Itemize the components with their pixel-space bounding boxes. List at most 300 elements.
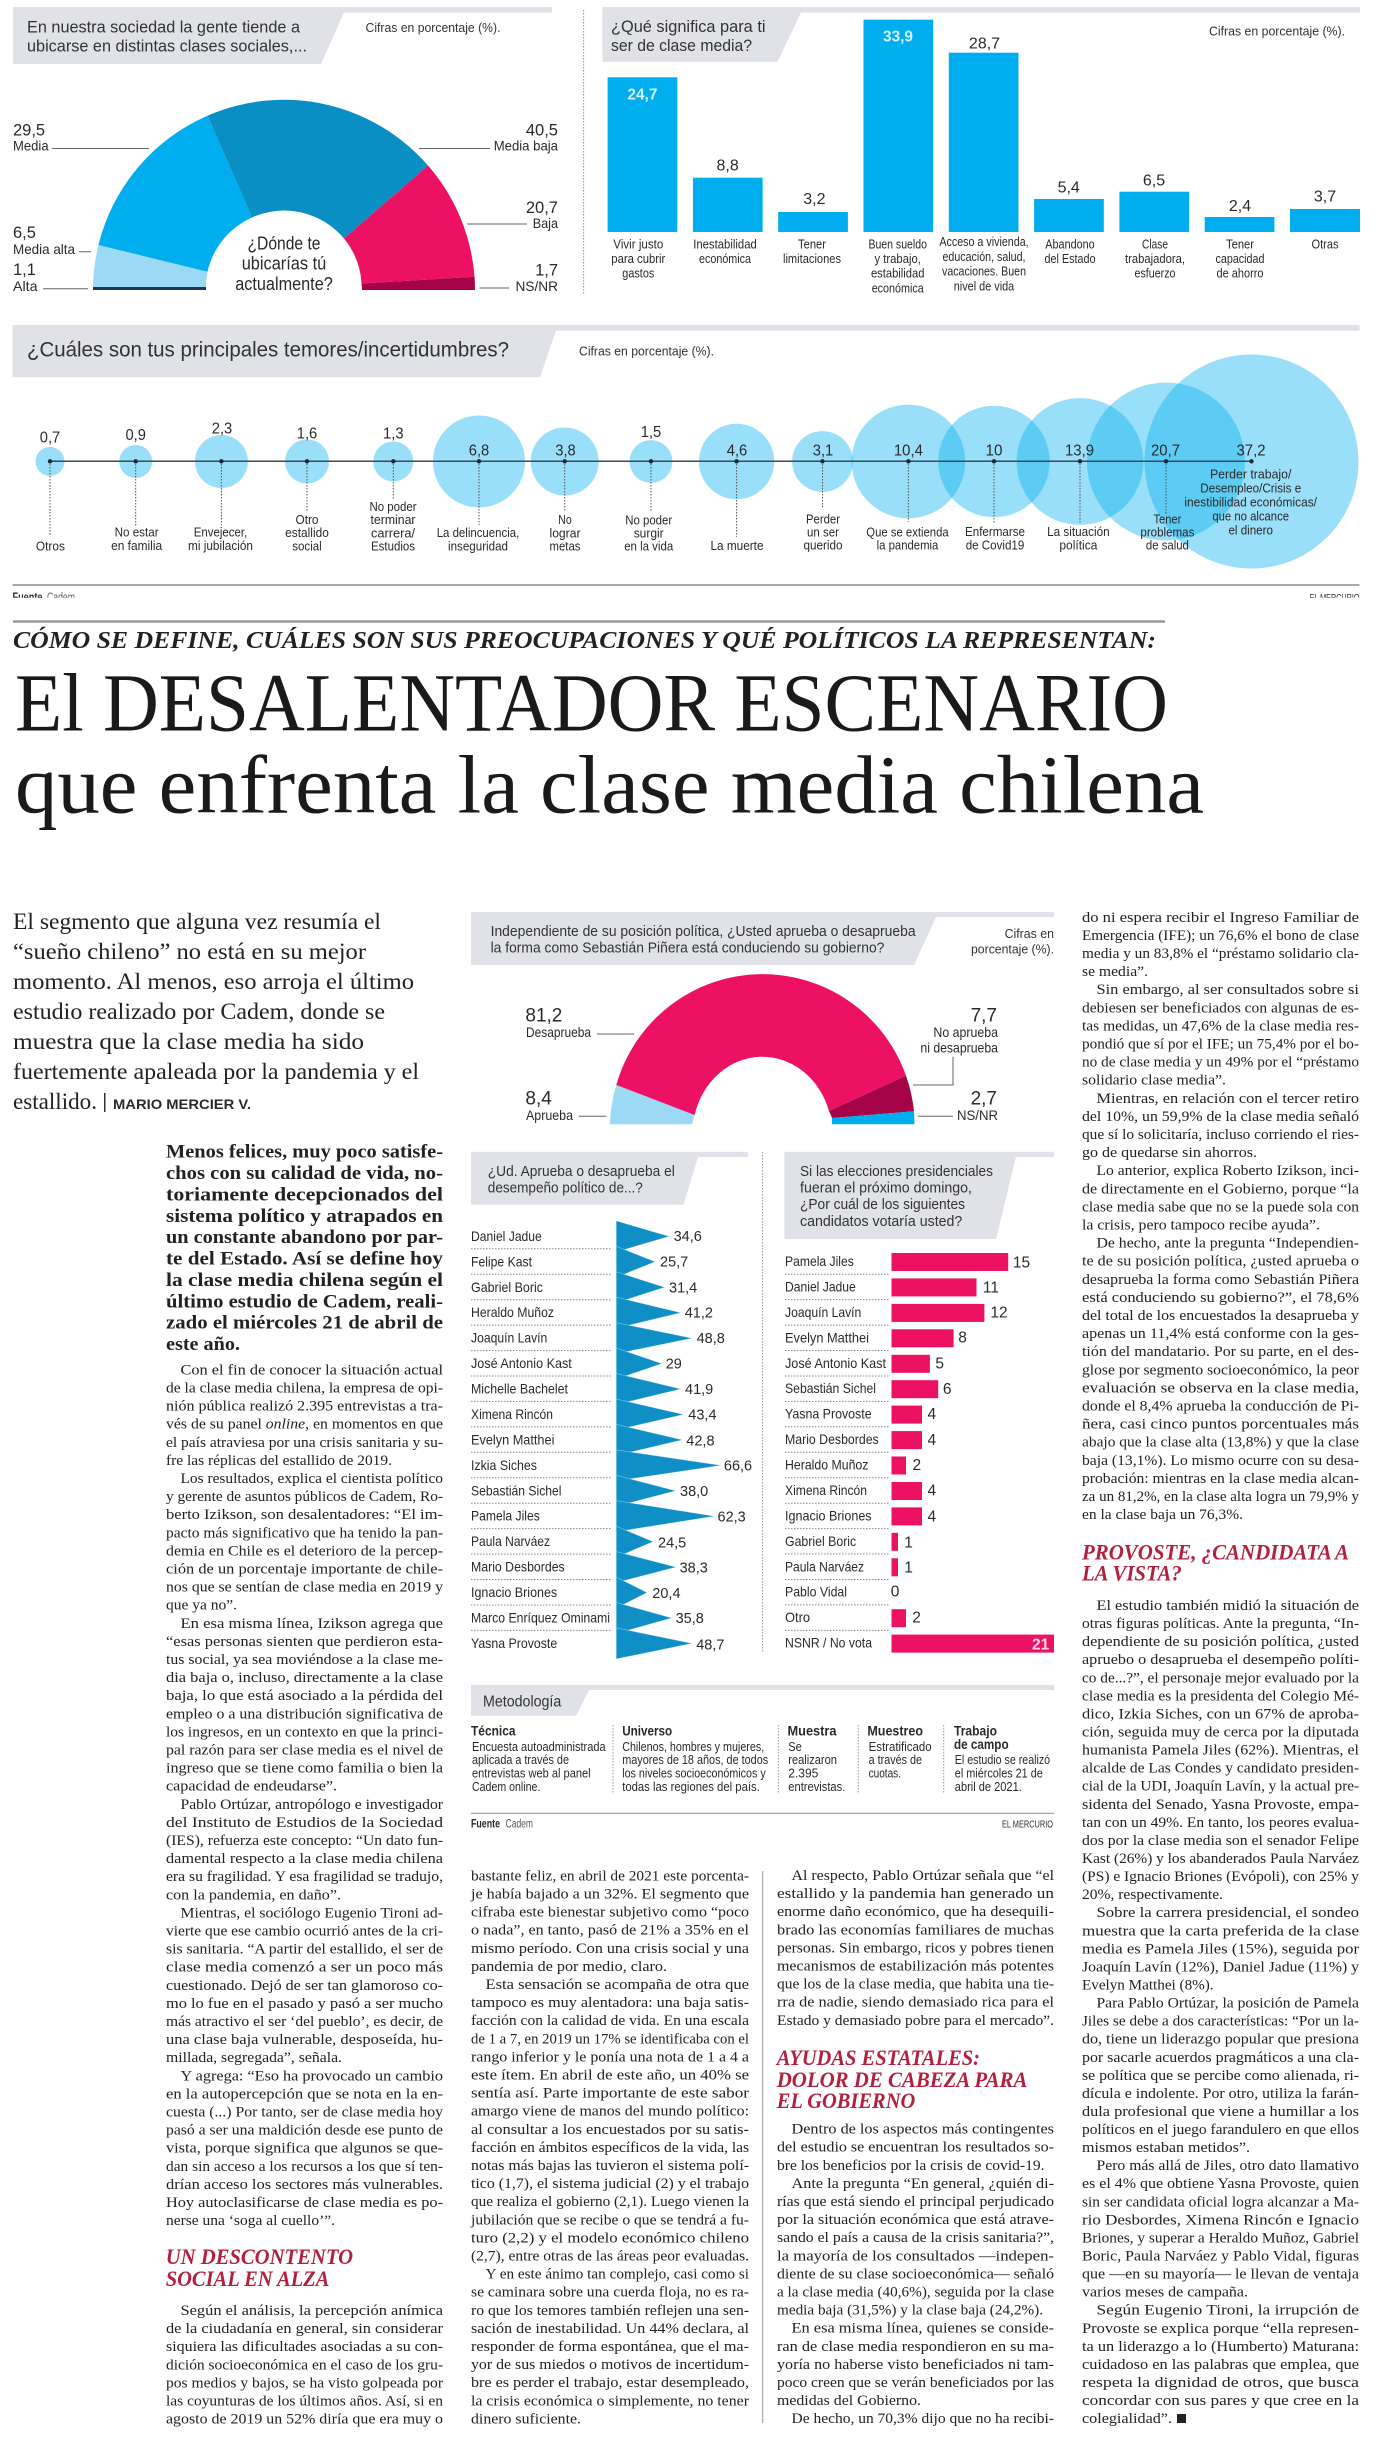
article column 1: capacidad de endeudarse”. [166, 1779, 337, 1795]
kicker: CÓMO SE DEFINE, CUÁLES SON SUS PREOCUPACIONES Y QUÉ POLÍTICOS LA REPRESENTAN: [13, 627, 1156, 654]
bubble labels: La situación [1047, 524, 1110, 539]
approval values: 62,3 [718, 1510, 746, 1526]
heading: social class question: En nuestra sociedad la gente tiende a [27, 18, 301, 36]
heading: meaning question: ser de clase media? [611, 37, 752, 55]
article column 3 continuation: poco creen que se verán beneficiados por las [777, 2375, 1054, 2391]
bubble values: 4,6 [727, 443, 747, 460]
column: técnica: entrevistas web al panel [472, 1766, 591, 1780]
politician names: Joaquín Lavín [471, 1330, 547, 1346]
candidate names: Paula Narváez [785, 1558, 864, 1574]
bar category labels: limitaciones [783, 251, 841, 266]
bar category labels: del Estado [1044, 251, 1096, 266]
approval values: 48,8 [697, 1331, 725, 1347]
axis dots [48, 459, 1254, 463]
labels: left values: Alta [13, 278, 38, 294]
article column 2: responder de forma espontánea, que el ma- [471, 2339, 749, 2355]
subheading: provoste: LA VISTA? [1081, 1561, 1182, 1586]
politician names: Paula Narváez [471, 1533, 550, 1549]
intro paragraph [13, 909, 419, 1114]
bubble values: 2,3 [212, 421, 232, 438]
article column 4 continuation: sin ser candidata oficial logra alcanzar a Ma- [1082, 2194, 1359, 2210]
article column 4 continuation: Para Pablo Ortúzar, la posición de Pamela [1096, 1996, 1359, 2012]
article column 4 continuation: Boric, Paula Narváez y Pablo Vidal, figuras [1082, 2248, 1359, 2264]
article column 1: en la autopercepción que se nota en la en- [166, 2086, 443, 2102]
heading: politician approval question: ¿Ud. Aprueba o desaprueba el [488, 1164, 675, 1180]
politician names: Izkia Siches [471, 1457, 537, 1473]
article column 2: de 1 a 7, en 2019 un 17% se identificaba con el [471, 2031, 749, 2047]
bubble labels: metas [550, 538, 581, 553]
article column 3: Al respecto, Pablo Ortúzar señala que “el [792, 1868, 1054, 1884]
politician names: Ximena Rincón [471, 1406, 553, 1422]
article column 3: brado las economías familiares de muchas [777, 1922, 1054, 1938]
article column 2: Y en este ánimo tan complejo, casi como si [486, 2267, 749, 2283]
article column 4 continuation: dependiente de su posición política, ¿usted [1082, 1634, 1360, 1650]
article column 4 continuation [1082, 1598, 1360, 2427]
bubble labels: el dinero [1228, 522, 1273, 537]
bubble labels: estallido [285, 525, 329, 540]
bar category labels: y trabajo, [874, 251, 921, 266]
approval values: 66,6 [724, 1459, 752, 1475]
bubble labels: en la vida [624, 539, 674, 554]
intro paragraph: momento. Al menos, eso arroja el último [13, 969, 414, 994]
column: trabajo de campo: de campo [954, 1736, 1009, 1752]
article column 2: bastante feliz, en abril de 2021 este porcenta- [471, 1868, 749, 1884]
source line (cropped): Cadem [47, 592, 75, 604]
chart: class semicircle [93, 100, 475, 290]
article column 4: baja (13,1%). Lo mismo ocurre con su desa- [1082, 1453, 1359, 1469]
heading: fears question: ¿Cuáles son tus principales temores/incertidumbres? [27, 339, 509, 362]
article column 3 continuation: ran de clase media respondieron en su ma- [777, 2339, 1054, 2355]
bubble labels: Desempleo/Crisis e [1200, 480, 1301, 495]
article column 4: no de clase media y un 49% por el “préstamo [1082, 1055, 1359, 1071]
vote values: 4 [928, 1483, 936, 1500]
article column 1: damental respecto a la clase media chilena [166, 1851, 443, 1867]
article column 3 continuation: del estudio se encuentran los resultados so- [777, 2140, 1054, 2156]
bar values [627, 28, 1336, 215]
intro paragraph: El segmento que alguna vez resumía el [13, 909, 381, 934]
candidate names: NSNR / No vota [785, 1635, 872, 1651]
article column 4: za un 81,2%, en la clase alta logra un 79,9% y [1082, 1489, 1359, 1505]
article column 1: dan sin acceso a los recursos a los que sí ten- [166, 2159, 443, 2175]
article column 1 [166, 1362, 444, 2229]
article column 4 continuation: tan con un 49%. En tanto, los peores evalua- [1082, 1815, 1359, 1831]
bubble labels: Estudios [371, 538, 415, 553]
article column 4 continuation: ción, seguida muy de cerca por la diputada [1082, 1724, 1359, 1740]
approval values: 41,9 [685, 1382, 713, 1398]
source line: Cadem [506, 1818, 533, 1830]
row dividers [785, 1274, 889, 1630]
article column 1: clase media comenzó a ser un poco más [166, 1960, 443, 1976]
vote values [891, 1254, 1050, 1653]
note: figures in percent: Cifras en [1005, 927, 1054, 941]
heading: vote question: fueran el próximo domingo, [800, 1181, 972, 1197]
bubble labels: La muerte [710, 538, 764, 553]
bubble labels: lograr [550, 525, 581, 540]
article column 1: millada, segregada”, señala. [166, 2050, 342, 2066]
labels: left values [13, 122, 75, 294]
heading: meaning question: ¿Qué significa para ti [611, 18, 766, 36]
article column 4 continuation: Kast (26%) y los abanderados Paula Narváez [1082, 1851, 1359, 1867]
article column 3: estallido y la pandemia han generado un [777, 1886, 1055, 1902]
article column 4: abajo que la clase alta (13,8%) y que la clase [1082, 1435, 1359, 1451]
article column 4: del total de los encuestados la desaprueba y [1082, 1308, 1360, 1324]
column: universo: Chilenos, hombres y mujeres, [622, 1740, 764, 1754]
column: muestra [788, 1722, 845, 1794]
article column 2: rango inferior y le ponía una nota de 1 a 4 a [471, 2049, 749, 2065]
labels: approval values: ni desaprueba [920, 1040, 998, 1056]
bar values: 24,7 [627, 86, 657, 103]
article column 2: al consultar a los encuestados por su satis- [471, 2122, 749, 2138]
labels: right values: NS/NR [516, 278, 558, 294]
column: muestreo: cuotas. [869, 1766, 901, 1780]
candidate names: Ximena Rincón [785, 1482, 867, 1498]
article column 1: fre las réplicas del estallido de 2019. [166, 1453, 392, 1469]
article column 4: de directamente en el Gobierno, porque “la [1082, 1181, 1359, 1197]
vote values: 6 [943, 1381, 952, 1398]
intro paragraph: estallido. [13, 1089, 97, 1114]
article column 3 continuation: Dentro de los aspectos más contingentes [792, 2122, 1054, 2138]
bubble labels: mi jubilación [188, 538, 253, 553]
column: trabajo de campo: el miércoles 21 de [955, 1766, 1043, 1780]
article column 4: debiesen ser beneficiados con algunas de es- [1082, 1000, 1359, 1016]
heading: politician approval question: desempeño político de...? [488, 1181, 643, 1197]
article column 2: facción con la calidad de vida. En una escala [471, 2013, 749, 2029]
article column 4 continuation: Evelyn Matthei (8%). [1082, 1978, 1214, 1994]
bar category labels: de ahorro [1216, 266, 1264, 281]
article column 2 [470, 1868, 749, 2427]
article column 1: que ya no”. [166, 1598, 237, 1614]
article column 1: vista, porque significa que algunos se que- [166, 2141, 443, 2157]
approval values: 34,6 [674, 1229, 702, 1245]
article column 4: tas medidas, un 47,6% de la clase media res- [1082, 1018, 1359, 1034]
source line [471, 1818, 1053, 1830]
note: figures in percent [971, 927, 1054, 956]
bubble labels: carrera/ [371, 525, 415, 540]
vote values: 11 [983, 1280, 999, 1297]
column: universo: los niveles socioeconómicos y [622, 1766, 766, 1780]
lede: último estudio de Cadem, reali- [166, 1291, 443, 1312]
candidate names: Daniel Jadue [785, 1278, 856, 1294]
article column 3 continuation: De hecho, un 70,3% dijo que no ha recibi- [792, 2411, 1054, 2427]
article column 1: pasó a ser una maldición desde ese punto de [166, 2123, 443, 2139]
vote values: 2 [912, 1610, 921, 1626]
article column 3 [777, 1868, 1055, 2029]
column: muestreo: Estratificado [869, 1740, 932, 1754]
column: muestreo [867, 1722, 932, 1780]
article column 3: enorme daño económico, que ha desequili- [777, 1904, 1054, 1920]
article column 1: drían acceso los sectores más vulnerables. [166, 2177, 443, 2193]
bar values: 33,9 [883, 28, 913, 45]
source line (cropped) [12, 592, 1360, 604]
article column 1: sis sanitaria. “A partir del estallido, el ser de [166, 1942, 443, 1958]
note: figures in percent: Cifras en porcentaje (%). [579, 345, 714, 359]
bubble labels: de salud [1146, 538, 1189, 553]
lede: te del Estado. Así se define hoy [166, 1248, 444, 1270]
politician names: Sebastián Sichel [471, 1482, 562, 1498]
candidate names: Otro [785, 1609, 810, 1625]
bubble values: 3,8 [555, 443, 576, 460]
panel: meaning of middle class bar chart [602, 7, 1360, 295]
bubble labels: Que se extienda [866, 524, 949, 539]
article column 1: demia en Chile es el deterioro de la percep- [166, 1543, 443, 1559]
article column 3: rra de nadie, siendo demasiado rica para el [777, 1995, 1054, 2011]
article column 4: media y un 83,8% el “préstamo solidario cla- [1082, 946, 1359, 962]
labels: right values: 40,5 [526, 122, 558, 140]
article column 4 continuation: El estudio también midió la situación de [1096, 1598, 1359, 1614]
politician names: Michelle Bachelet [471, 1380, 568, 1396]
column: universo: todas las regiones del país. [622, 1780, 760, 1794]
article column 4: De hecho, ante la pregunta “Independien- [1096, 1236, 1359, 1252]
center question: ¿Dónde te [248, 233, 320, 253]
intro paragraph: estudio realizado por Cadem, donde se [13, 999, 385, 1024]
article column 4: Emergencia (IFE); un 76,6% el bono de clase [1082, 928, 1359, 944]
bubble labels: Perder trabajo/ [1210, 466, 1292, 481]
article column 4 continuation: respeta la dignidad de otros, que busca [1082, 2375, 1359, 2391]
heading: social class question [27, 18, 307, 56]
article column 2: sentía así. Parte importante de este sabor [471, 2086, 749, 2102]
bubble labels: Perder [806, 511, 841, 526]
article column 1 continuation: dición socioeconómica en el caso de los gru- [166, 2357, 443, 2373]
bar category labels: esfuerzo [1134, 266, 1176, 281]
note: figures in percent: Cifras en porcentaje (%). [1209, 25, 1345, 39]
labels: approval values: No aprueba [933, 1024, 998, 1040]
article column 1: y gerente de asuntos públicos de Cadem, Ro- [166, 1489, 443, 1505]
politician names: Evelyn Matthei [471, 1431, 554, 1447]
politician names: Yasna Provoste [471, 1635, 557, 1651]
article column 4 continuation: 20%, respectivamente. [1082, 1887, 1223, 1903]
candidate names: Sebastián Sichel [785, 1380, 876, 1396]
article column 2: facción en ámbitos específicos de la vida, las [471, 2140, 749, 2156]
bubble labels: Envejecer, [194, 525, 247, 540]
article column 4 continuation: dula profesional que viene a humillar a los [1082, 2104, 1359, 2120]
article column 3: Estado y demasiado pobre para el mercado”. [777, 2013, 1054, 2029]
approval values: 35,8 [676, 1611, 704, 1627]
column: técnica: Encuesta autoadministrada [472, 1740, 606, 1754]
article column 4 continuation: ta un liderazgo a lo (Humberto) Maturana: [1082, 2339, 1359, 2355]
bubble values: 10 [986, 443, 1003, 460]
article column 1: En esa misma línea, Izikson agrega que [180, 1616, 443, 1632]
heading: methodology: Metodología [483, 1694, 562, 1711]
article column 1: baja, lo que está asociado a la pérdida del [166, 1688, 443, 1704]
article column 4 continuation: clase media es la presidenta del Colegio Mé- [1082, 1688, 1359, 1704]
bubble values: 10,4 [894, 443, 923, 460]
candidate names: Heraldo Muñoz [785, 1456, 868, 1472]
article column 4 continuation: alcalde de Las Condes y candidato presiden- [1082, 1761, 1359, 1777]
article column 2: turo (2,2) y el modelo económico chileno [471, 2230, 749, 2246]
vote bars [892, 1253, 1054, 1653]
heading: meaning question [611, 18, 766, 55]
column: universo [622, 1722, 768, 1794]
article column 2: dinero suficiente. [471, 2411, 581, 2427]
candidate names: Ignacio Briones [785, 1507, 872, 1523]
bubble labels: de Covid19 [966, 537, 1024, 552]
column: trabajo de campo [954, 1722, 1050, 1794]
bar category labels: económica [699, 251, 752, 266]
labels: left values: 29,5 [13, 122, 45, 140]
approval values: 38,0 [680, 1484, 708, 1500]
article column 4: glose por segmento socioeconómico, la peor [1082, 1362, 1359, 1378]
article column 1: mo lo fue en el pasado y pasó a ser mucho [166, 1996, 443, 2012]
article column 4: apenas un 11,4% está conforme con la ges- [1082, 1326, 1359, 1342]
article column 4 continuation: co de...?”, el personaje mejor evaluado por la [1082, 1670, 1359, 1686]
bubble labels: inestibilidad económicas/ [1184, 494, 1317, 509]
article column 4 continuation: dos por la clase media son el senador Felipe [1082, 1833, 1359, 1849]
article column 4: en la clase baja un 76,3%. [1082, 1507, 1243, 1523]
article column 4 continuation: muestra que la carta preferida de la clase [1082, 1923, 1359, 1939]
lede: chos con su calidad de vida, no- [166, 1163, 443, 1184]
lede: la clase media chilena según el [166, 1270, 443, 1291]
vote values: 21 [1032, 1636, 1050, 1653]
bubble labels: Otro [296, 512, 318, 527]
article column 4: pondió que sí por el IFE; un 75,4% por el bo- [1082, 1036, 1359, 1052]
candidate names: José Antonio Kast [785, 1355, 886, 1371]
article column 3 continuation: por la situación económica que está atrave- [777, 2212, 1054, 2228]
column: universo: mayores de 18 años, de todos [622, 1753, 768, 1767]
article column 4 continuation: otras figuras políticas. Ante la pregunta, “In- [1082, 1616, 1359, 1632]
subheading: un descontento social en alza [166, 2244, 353, 2291]
article column 4 continuation: mismos estaban metidos”. [1082, 2140, 1250, 2156]
politician names: Marco Enríquez Ominami [471, 1610, 610, 1626]
lede: Menos felices, muy poco satisfe- [166, 1142, 443, 1163]
politician names [471, 1228, 610, 1651]
article column 1 continuation: pos medios y bajos, se ha visto golpeada por [166, 2375, 443, 2391]
labels: approval values: 7,7 [971, 1006, 997, 1027]
labels: right values: Baja [533, 215, 558, 231]
article column 4 continuation: Según Eugenio Tironi, la irrupción de [1096, 2303, 1359, 2319]
article column 3 continuation: rías que está siendo el principal perjudicado [777, 2194, 1054, 2210]
labels: left values: Media alta [13, 241, 75, 257]
leader lines [43, 148, 527, 289]
article column 4: está conduciendo su gobierno?”, el 78,6% [1082, 1290, 1359, 1306]
article column 4 continuation: políticos en el juego farandulero en que ellos [1082, 2122, 1359, 2138]
labels: approval values [525, 1006, 998, 1123]
bubble labels: terminar [370, 512, 416, 527]
vote values: 1 [904, 1560, 913, 1576]
lede: toriamente decepcionados del [166, 1184, 443, 1205]
article column 4 continuation: humanista Pamela Jiles (62%). Mientras, el [1082, 1743, 1359, 1759]
bubble values [40, 421, 1266, 460]
article column 1: Con el fin de conocer la situación actual [180, 1362, 443, 1378]
article column 1: tus social, ya sea moviéndose a la clase me- [166, 1652, 443, 1668]
article column 4: que sí lo solicitaría, incluso corriendo el ries- [1082, 1127, 1359, 1143]
subheading: ayudas estatales: DOLOR DE CABEZA PARA [776, 2067, 1027, 2092]
article column 4: Lo anterior, explica Roberto Izikson, inci- [1096, 1163, 1359, 1179]
article column 4 continuation: concordar con sus pares y que cree en la [1082, 2393, 1359, 2409]
article column 3 continuation: la mayoría de los consultados —indepen- [777, 2248, 1054, 2264]
labels: right values: 20,7 [526, 199, 558, 217]
column: técnica: aplicada a través de [472, 1753, 569, 1767]
article column 2: sación de inestabilidad. Un 44% declara, al [471, 2321, 749, 2337]
vote values: 5 [935, 1355, 944, 1372]
bubble labels: querido [804, 538, 842, 553]
subheading: un descontento social en alza: SOCIAL EN ALZA [166, 2266, 329, 2291]
article column 3: que los de la clase media, que habita una tie- [777, 1977, 1054, 1993]
article column 4 continuation: dico, Izkia Siches, con un 67% de aproba- [1082, 1706, 1359, 1722]
bar category labels: trabajadora, [1125, 251, 1185, 266]
lede: un constante abandono por par- [166, 1227, 443, 1248]
article column 4: se media”. [1082, 964, 1148, 980]
approval values: 25,7 [660, 1255, 688, 1271]
article column 4: clase media sabe que no se la puede sola con [1082, 1199, 1360, 1215]
article column 1 continuation: agosto de 2019 un 52% diría que era muy o [166, 2412, 443, 2428]
article column 1: Pablo Ortúzar, antropólogo e investigador [180, 1797, 443, 1813]
labels: approval values: 8,4 [525, 1088, 552, 1109]
vote values: 0 [891, 1584, 900, 1601]
column: muestreo: a través de [869, 1753, 922, 1767]
bar category labels: Abandono [1045, 236, 1095, 251]
article column 1: ingreso que se tiene como familia o bien la [166, 1761, 443, 1777]
article column 4 continuation: que —en su mayoría— le llevan de ventaja [1082, 2267, 1359, 2283]
vote values: 8 [958, 1330, 967, 1346]
article column 4 continuation: por sacarle acuerdos pragmáticos a una cla- [1082, 2050, 1359, 2066]
article column 1: nos que se sentían de clase media en 2019 y [166, 1580, 444, 1596]
labels: approval values: 2,7 [971, 1088, 997, 1109]
approval values: 24,5 [658, 1535, 686, 1551]
chart: approval semicircle [610, 974, 914, 1124]
bar values: 3,7 [1314, 189, 1336, 206]
heading: vote question [800, 1164, 993, 1230]
column: técnica [471, 1722, 606, 1794]
bar values: 2,4 [1229, 198, 1251, 215]
article column 2: este ítem. En abril de este año, un 40% se [471, 2068, 749, 2084]
candidate names: Evelyn Matthei [785, 1329, 869, 1345]
subheading: provoste [1081, 1539, 1349, 1586]
subheading: ayudas estatales: EL GOBIERNO [776, 2088, 915, 2113]
article column 4 continuation: Briones, y superar a Heraldo Muñoz, Gabriel [1082, 2230, 1359, 2246]
bar category labels: Inestabilidad [693, 236, 757, 251]
politician names: Pamela Jiles [471, 1508, 540, 1524]
article column 4 continuation: dícula e indolente. Por otro, utiliza la farán- [1082, 2086, 1359, 2102]
heading: approval question: la forma como Sebastián Piñera está conduciendo su gobierno? [491, 940, 884, 956]
bubble labels: Enfermarse [965, 524, 1025, 539]
candidate names: Pamela Jiles [785, 1253, 854, 1269]
article column 4 continuation: (PS) e Ignacio Briones (Evópoli), con 25% y [1082, 1869, 1360, 1885]
article column 4: ñera, casi cinco puntos porcentuales más [1082, 1417, 1359, 1433]
article column 2: bre es perder el trabajo, estar desempleado, [471, 2375, 749, 2391]
article column 4: donde el 8,4% aprueba la conducción de Pi- [1082, 1398, 1359, 1414]
article column 4 continuation: es el 4% que obtiene Yasna Provoste, quien [1082, 2176, 1360, 2192]
bubble labels: No estar [115, 525, 159, 540]
column: trabajo de campo: abril de 2021. [955, 1780, 1022, 1794]
approval values: 42,8 [686, 1434, 715, 1450]
bar category labels [611, 234, 1339, 295]
panel: Piñera approval chart [471, 912, 1054, 1124]
bar category labels: estabilidad [871, 266, 924, 281]
article column 4 continuation: Sobre la carrera presidencial, el sondeo [1096, 1905, 1359, 1921]
article column 1: Hoy autoclasificarse de clase media es po- [166, 2195, 443, 2211]
article column 4: tión del mandatario. Por su parte, en el des- [1082, 1344, 1359, 1360]
triangles [616, 1221, 721, 1659]
source line: Fuente [471, 1818, 500, 1830]
article column 4 [1082, 910, 1360, 1523]
column: técnica: Cadem online. [472, 1780, 540, 1794]
article column 2: tampoco es muy alentadora: una baja satis- [471, 1995, 749, 2011]
article column 1: vés de su panel online, en momentos en que [166, 1417, 443, 1433]
bubble labels: un ser [807, 525, 840, 540]
intro paragraph: “sueño chileno” no está en su mejor [13, 939, 366, 964]
article column 4: te de su posición política, ¿usted aprueba o [1082, 1254, 1359, 1270]
article column 1: más atractivo el ser ‘del pueblo’, es decir, de [166, 2014, 443, 2030]
bubble values: 0,7 [40, 430, 60, 447]
center question: actualmente? [235, 274, 333, 294]
article column 4 continuation: rio Desbordes, Ximena Rincón e Ignacio [1082, 2212, 1359, 2228]
article column 2: notas más bajas las tuvieron el sistema polí- [471, 2158, 749, 2174]
bubble labels: La delincuencia, [437, 525, 519, 540]
article column 4 continuation: sidenta del Senado, Yasna Provoste, empa- [1082, 1797, 1359, 1813]
article column 1: Y agrega: “Eso ha provocado un cambio [180, 2068, 443, 2084]
article column 3 continuation [777, 2122, 1054, 2427]
article column 1 continuation: las coyunturas de los últimos años. Así, si en [166, 2394, 444, 2410]
